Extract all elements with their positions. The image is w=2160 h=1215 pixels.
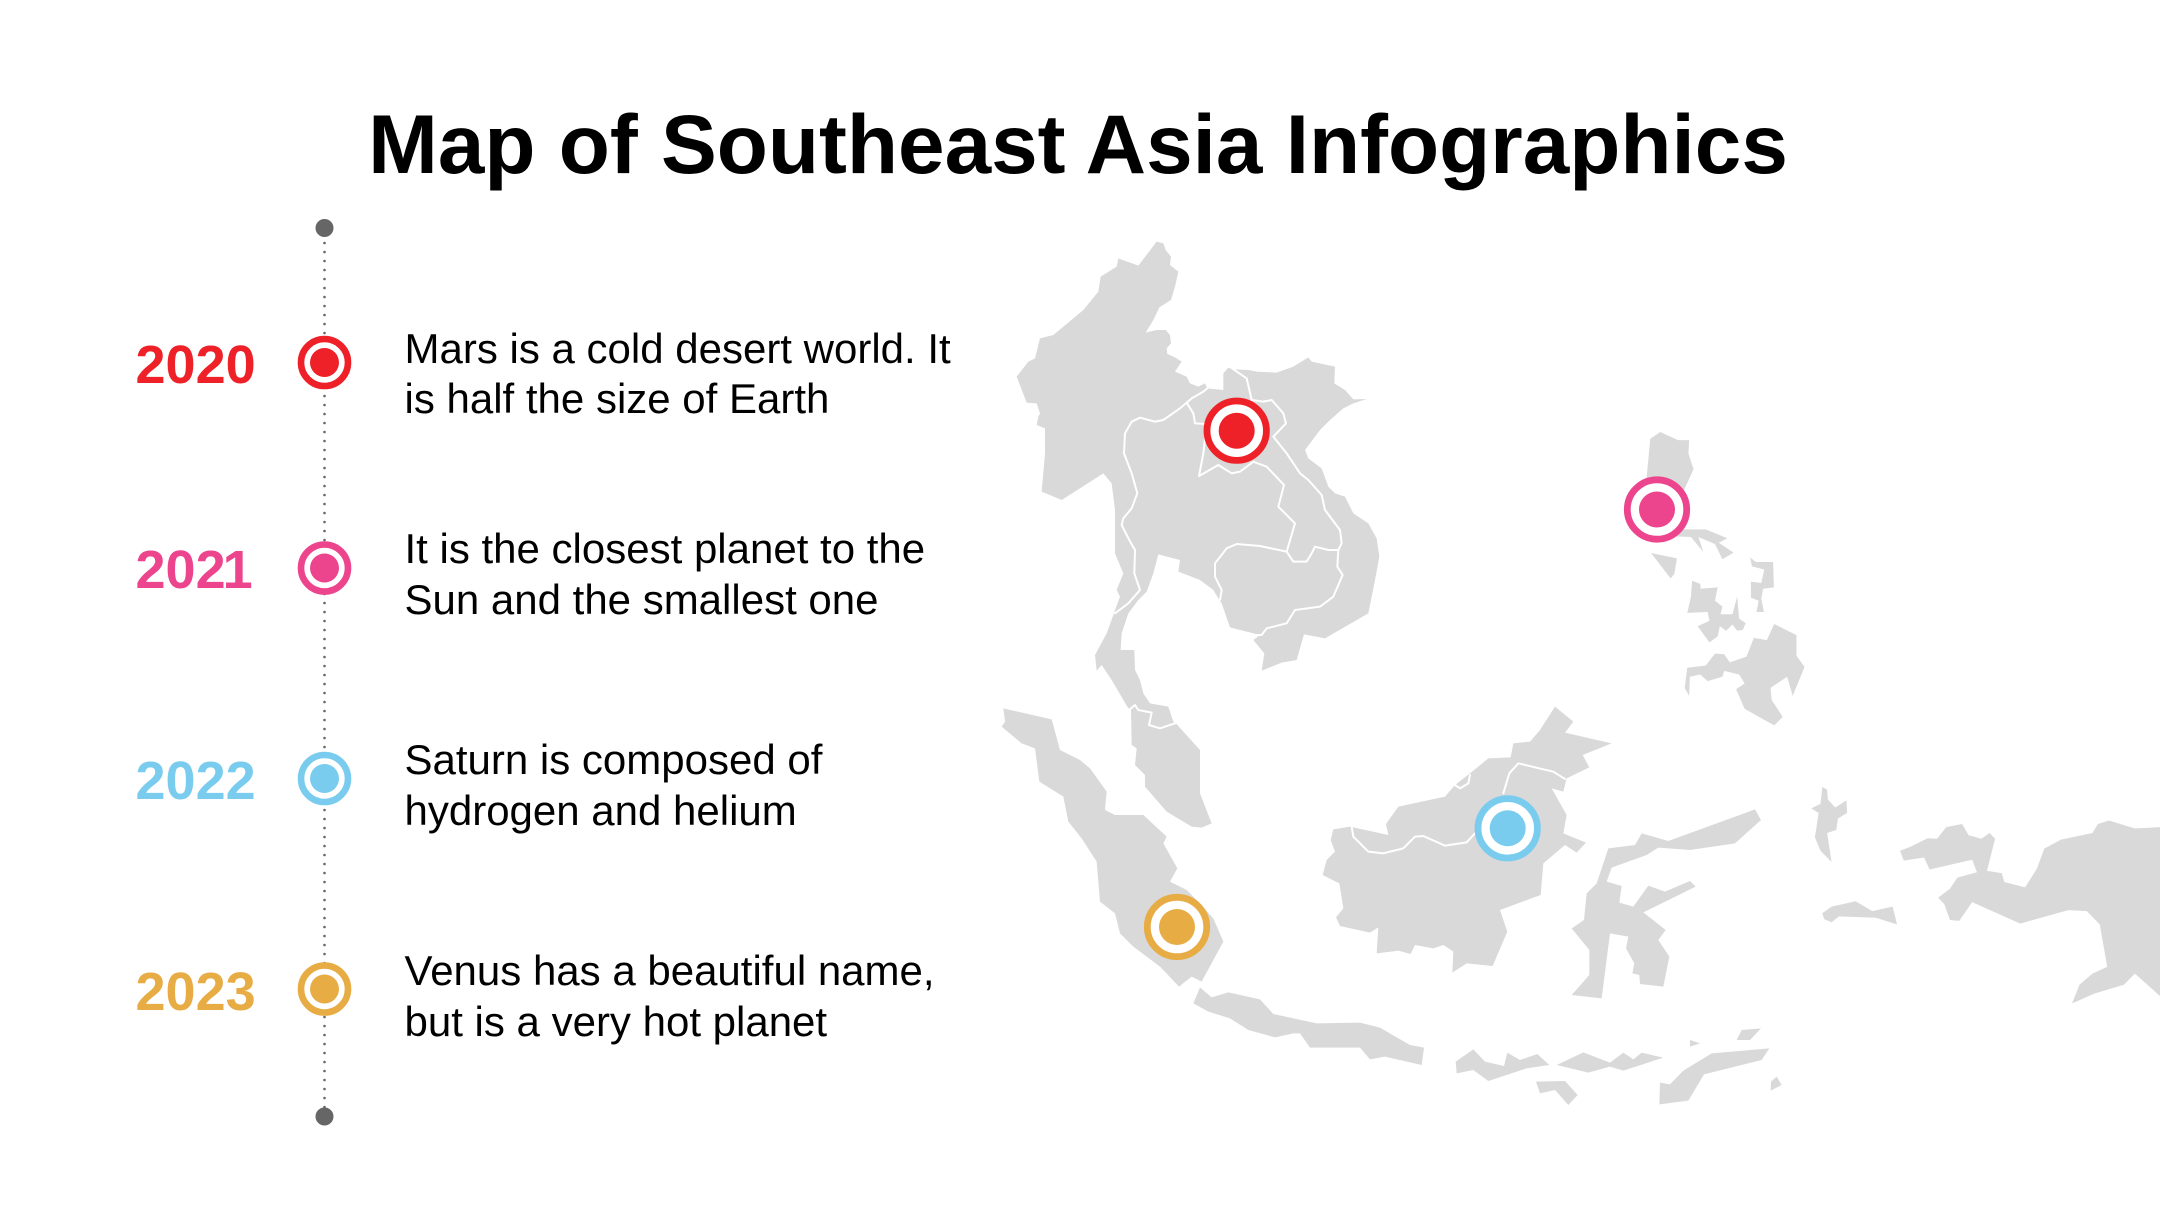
timeline (136, 219, 951, 1126)
timeline end dot (316, 1108, 334, 1126)
Borneo, Sulawesi and Lesser Sunda islands (1323, 707, 1782, 1105)
text 2023: Venus has a beautiful name, (404, 947, 935, 994)
mainland and peninsula (1017, 242, 1379, 828)
year 2023: 2023 (136, 962, 256, 1022)
text 2021: It is the closest planet to the (404, 525, 925, 572)
marker 2020 (301, 339, 348, 386)
entry: 2020 (136, 325, 951, 422)
timeline start dot (316, 219, 334, 237)
text 2023: but is a very hot planet (404, 998, 827, 1045)
map pin: orange (1147, 897, 1207, 957)
entry: 2023 (136, 947, 935, 1045)
text 2020: Mars is a cold desert world. It (404, 325, 951, 372)
map pin: pink (1627, 480, 1687, 539)
marker 2021 (301, 544, 348, 592)
marker 2022 (301, 755, 348, 802)
map pin: blue (1478, 799, 1537, 858)
timeline dotted axis (323, 243, 326, 1108)
Sumatra and Java (1002, 708, 1424, 1065)
year 2022: 2022 (136, 751, 256, 811)
entry: 2022 (136, 736, 823, 834)
title: Map of Southeast Asia Infographics (368, 97, 1788, 191)
text 2021: Sun and the smallest one (404, 576, 878, 623)
year 2021: 2021 (136, 540, 253, 600)
entry: 2021 (136, 525, 925, 623)
marker 2023 (301, 966, 348, 1012)
map pin: red (1207, 401, 1266, 460)
text 2020: is half the size of Earth (404, 375, 829, 422)
Philippines, Maluku and Papua (1647, 432, 2160, 1003)
year 2020: 2020 (136, 335, 256, 395)
text 2022: hydrogen and helium (404, 787, 797, 834)
map of Southeast Asia (1002, 242, 2160, 1105)
text 2022: Saturn is composed of (404, 736, 823, 783)
